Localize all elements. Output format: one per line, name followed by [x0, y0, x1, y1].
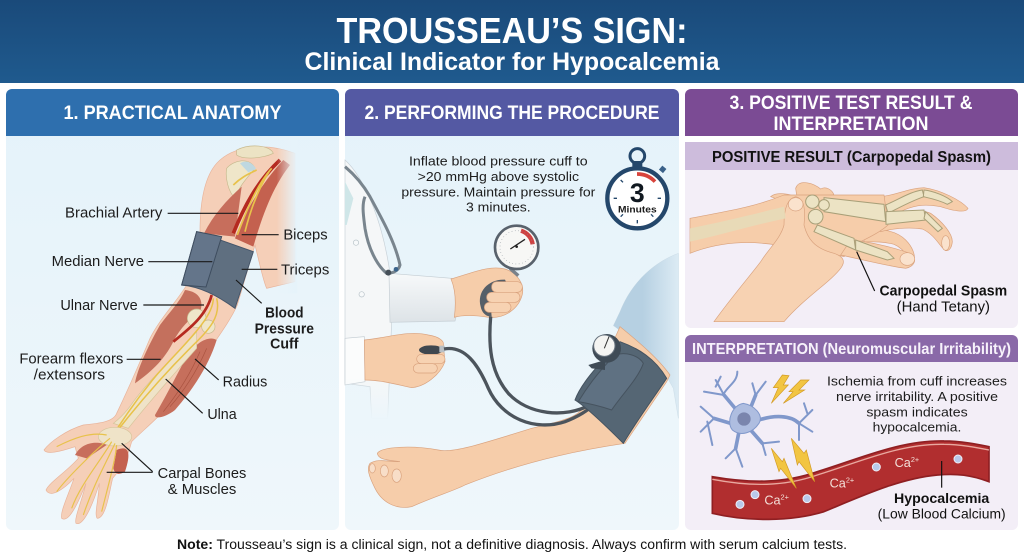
anatomy labels: Ulnar Nerve [60, 298, 138, 314]
sub-panel: positive result [685, 142, 1018, 328]
icon: neuron [701, 372, 812, 467]
patient shirt [613, 253, 678, 418]
doctor coat [345, 160, 392, 418]
second finger [881, 211, 952, 251]
anatomy labels [19, 206, 329, 498]
interpretation text: Ischemia from cuff increases [827, 374, 1007, 389]
panel: performing the procedure [345, 89, 679, 530]
interpretation text: spasm indicates [866, 404, 968, 419]
procedure instruction text: 3 minutes. [466, 200, 531, 215]
anatomy labels: Triceps [281, 263, 329, 279]
title banner [0, 0, 1024, 83]
arm cuff [575, 342, 667, 443]
sub-panel: interpretation [685, 335, 1018, 530]
anatomy labels: Blood [265, 305, 303, 321]
doctor upper hand [451, 268, 523, 318]
thumb [841, 240, 915, 268]
upper arm muscles [204, 187, 242, 237]
heading: practical anatomy: 1. PRACTICAL ANATOMY [64, 102, 282, 124]
panel: positive test result and interpretation [685, 89, 1018, 530]
procedure instruction text [401, 153, 596, 215]
panel: practical anatomy [6, 89, 339, 530]
blood vessel with calcium ions: Ca [895, 456, 911, 470]
icon: lightning bolts [771, 375, 815, 488]
anatomy labels: Biceps [283, 227, 328, 243]
heading: positive test result: 3. POSITIVE TEST RESULT & [730, 92, 972, 114]
blood vessel with calcium ions: 2+ [781, 492, 789, 501]
blood vessel with calcium ions [712, 441, 989, 519]
artery lower [173, 295, 212, 342]
anatomy labels: & Muscles [168, 482, 236, 498]
label: carpopedal spasm [879, 284, 1007, 316]
blood vessel with calcium ions: Ca [764, 493, 781, 507]
anatomy labels: Pressure [255, 321, 314, 337]
heading: performing the procedure: 2. PERFORMING THE PROCEDURE [364, 102, 660, 124]
blood vessel with calcium ions: 2+ [911, 455, 919, 464]
shoulder bones [237, 146, 273, 158]
illustration: hand in carpopedal spasm [690, 183, 968, 322]
gauge [510, 268, 518, 276]
anatomical arm illustration [44, 140, 297, 524]
anatomy labels: Carpal Bones [158, 466, 246, 482]
tubing [444, 348, 593, 425]
doctor lower hand [364, 333, 445, 388]
label: hypocalcemia [878, 490, 1006, 521]
anatomy labels: Cuff [270, 337, 299, 353]
label: carpopedal spasm: (Hand Tetany) [897, 300, 990, 316]
title banner: Clinical Indicator for Hypocalcemia [304, 48, 721, 76]
examiner hand [714, 197, 843, 322]
forearm and back of hand [690, 195, 888, 257]
forearm bones [113, 332, 197, 428]
sub-panel: positive result: POSITIVE RESULT (Carpopedal Spasm) [712, 149, 991, 166]
index finger [881, 188, 968, 218]
icon: 3 minute stopwatch: Minutes [618, 205, 657, 215]
anatomy labels: Brachial Artery [65, 206, 163, 222]
anatomy labels: Radius [223, 374, 267, 390]
procedure instruction text: >20 mmHg above systolic [418, 169, 579, 184]
leader lines [107, 213, 279, 472]
heading: positive test result [730, 92, 972, 135]
hand bones [690, 207, 786, 242]
anatomy labels: Ulna [207, 407, 237, 423]
forearm muscles [135, 290, 201, 383]
anatomy labels: Median Nerve [52, 254, 144, 270]
label: hypocalcemia: Hypocalcemia [894, 490, 990, 506]
footer note: Note: Trousseau’s sign is a clinical sign, not a definitive diagnosis. Always confirm with serum calcium tests. [177, 537, 847, 552]
procedure instruction text: Inflate blood pressure cuff to [409, 153, 588, 168]
blood vessel with calcium ions: Ca [830, 477, 846, 491]
anatomy labels: /extensors [34, 368, 105, 384]
interpretation text: hypocalcemia. [873, 420, 961, 435]
wrist and hand [98, 427, 132, 446]
procedure instruction text: pressure. Maintain pressure for [401, 184, 596, 199]
stethoscope [345, 167, 400, 273]
icon: 3 minute stopwatch [607, 149, 667, 228]
anatomy labels: Forearm flexors [19, 352, 123, 368]
title banner: TROUSSEAU’S SIGN: [336, 10, 688, 51]
nerves lower arm [110, 298, 218, 440]
interpretation text [827, 374, 1007, 435]
label: hypocalcemia: (Low Blood Calcium) [878, 505, 1006, 521]
interpretation text: nerve irritability. A positive [836, 389, 998, 404]
procedure illustration [345, 160, 678, 507]
curled finger [864, 230, 914, 261]
icon: 3 minute stopwatch: 3 [630, 178, 645, 208]
sub-panel: interpretation: INTERPRETATION (Neuromuscular Irritability) [692, 341, 1011, 358]
spasm leader line [857, 252, 875, 291]
patient arm [368, 327, 670, 507]
heading: positive test result: INTERPRETATION [774, 113, 928, 135]
blood vessel with calcium ions: 2+ [846, 476, 854, 485]
label: carpopedal spasm: Carpopedal Spasm [879, 284, 1007, 300]
cuff [182, 232, 253, 308]
